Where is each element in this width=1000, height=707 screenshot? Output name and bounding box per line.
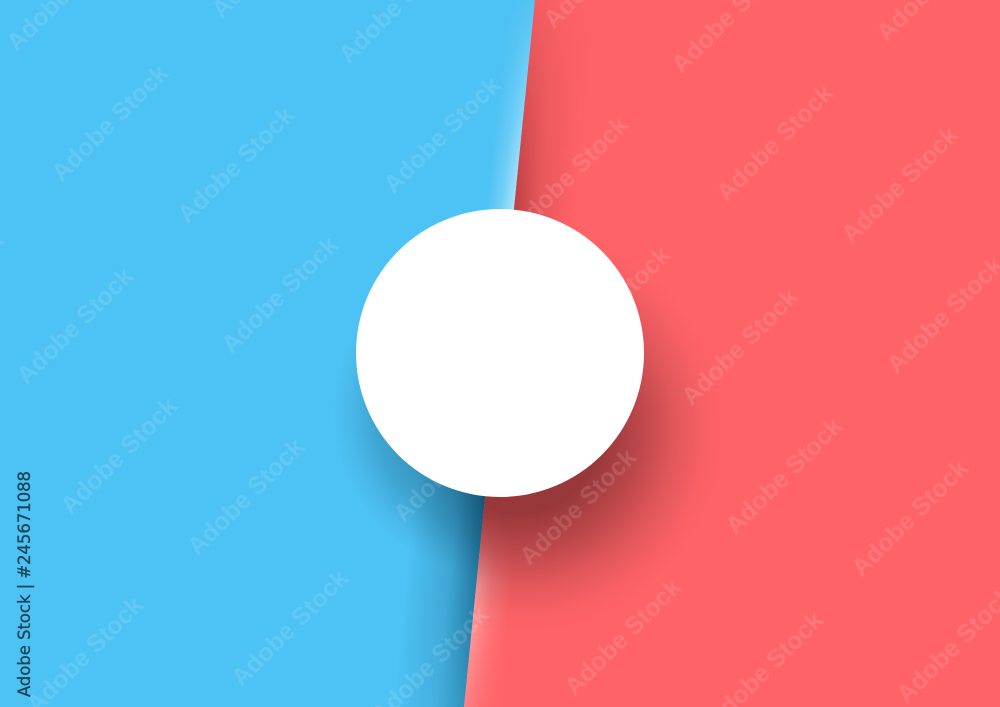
watermarks: Adobe Stock xyxy=(548,241,676,369)
shadow: circle on red xyxy=(474,283,702,612)
watermarks: Adobe Stock xyxy=(720,412,848,540)
watermarks: Adobe Stock xyxy=(46,59,174,187)
watermarks: Adobe Stock xyxy=(388,400,516,528)
highlight: upper blue edge xyxy=(489,2,534,210)
shadow: upper red edge xyxy=(514,0,566,222)
highlight: lower red edge xyxy=(464,535,504,707)
watermarks: Adobe Stock xyxy=(506,111,634,239)
watermarks: Adobe Stock xyxy=(846,454,974,582)
watermarks: Adobe Stock xyxy=(351,268,479,396)
watermarks: Adobe Stock xyxy=(11,262,139,390)
watermarks: Adobe Stock xyxy=(216,231,344,359)
white circle xyxy=(356,209,644,497)
watermarks: Adobe Stock xyxy=(836,121,964,249)
watermarks: Adobe Stock xyxy=(559,573,687,701)
panel: red right side xyxy=(464,0,1000,707)
stock id label: Adobe Stock | #245671088 xyxy=(15,471,35,697)
watermarks: Adobe Stock xyxy=(378,71,506,199)
shadow: circle on blue xyxy=(346,361,485,554)
watermarks: Adobe Stock xyxy=(226,564,354,692)
shadow: lower blue edge xyxy=(410,479,485,707)
panel: blue left side xyxy=(346,2,534,707)
watermarks: Adobe Stock xyxy=(514,443,642,571)
watermarks: Adobe Stock xyxy=(172,101,300,229)
watermarks: Adobe Stock xyxy=(711,79,839,207)
watermarks: Adobe Stock xyxy=(55,392,183,520)
watermarks: Adobe Stock xyxy=(182,433,310,561)
watermarks: Adobe Stock xyxy=(676,283,804,411)
